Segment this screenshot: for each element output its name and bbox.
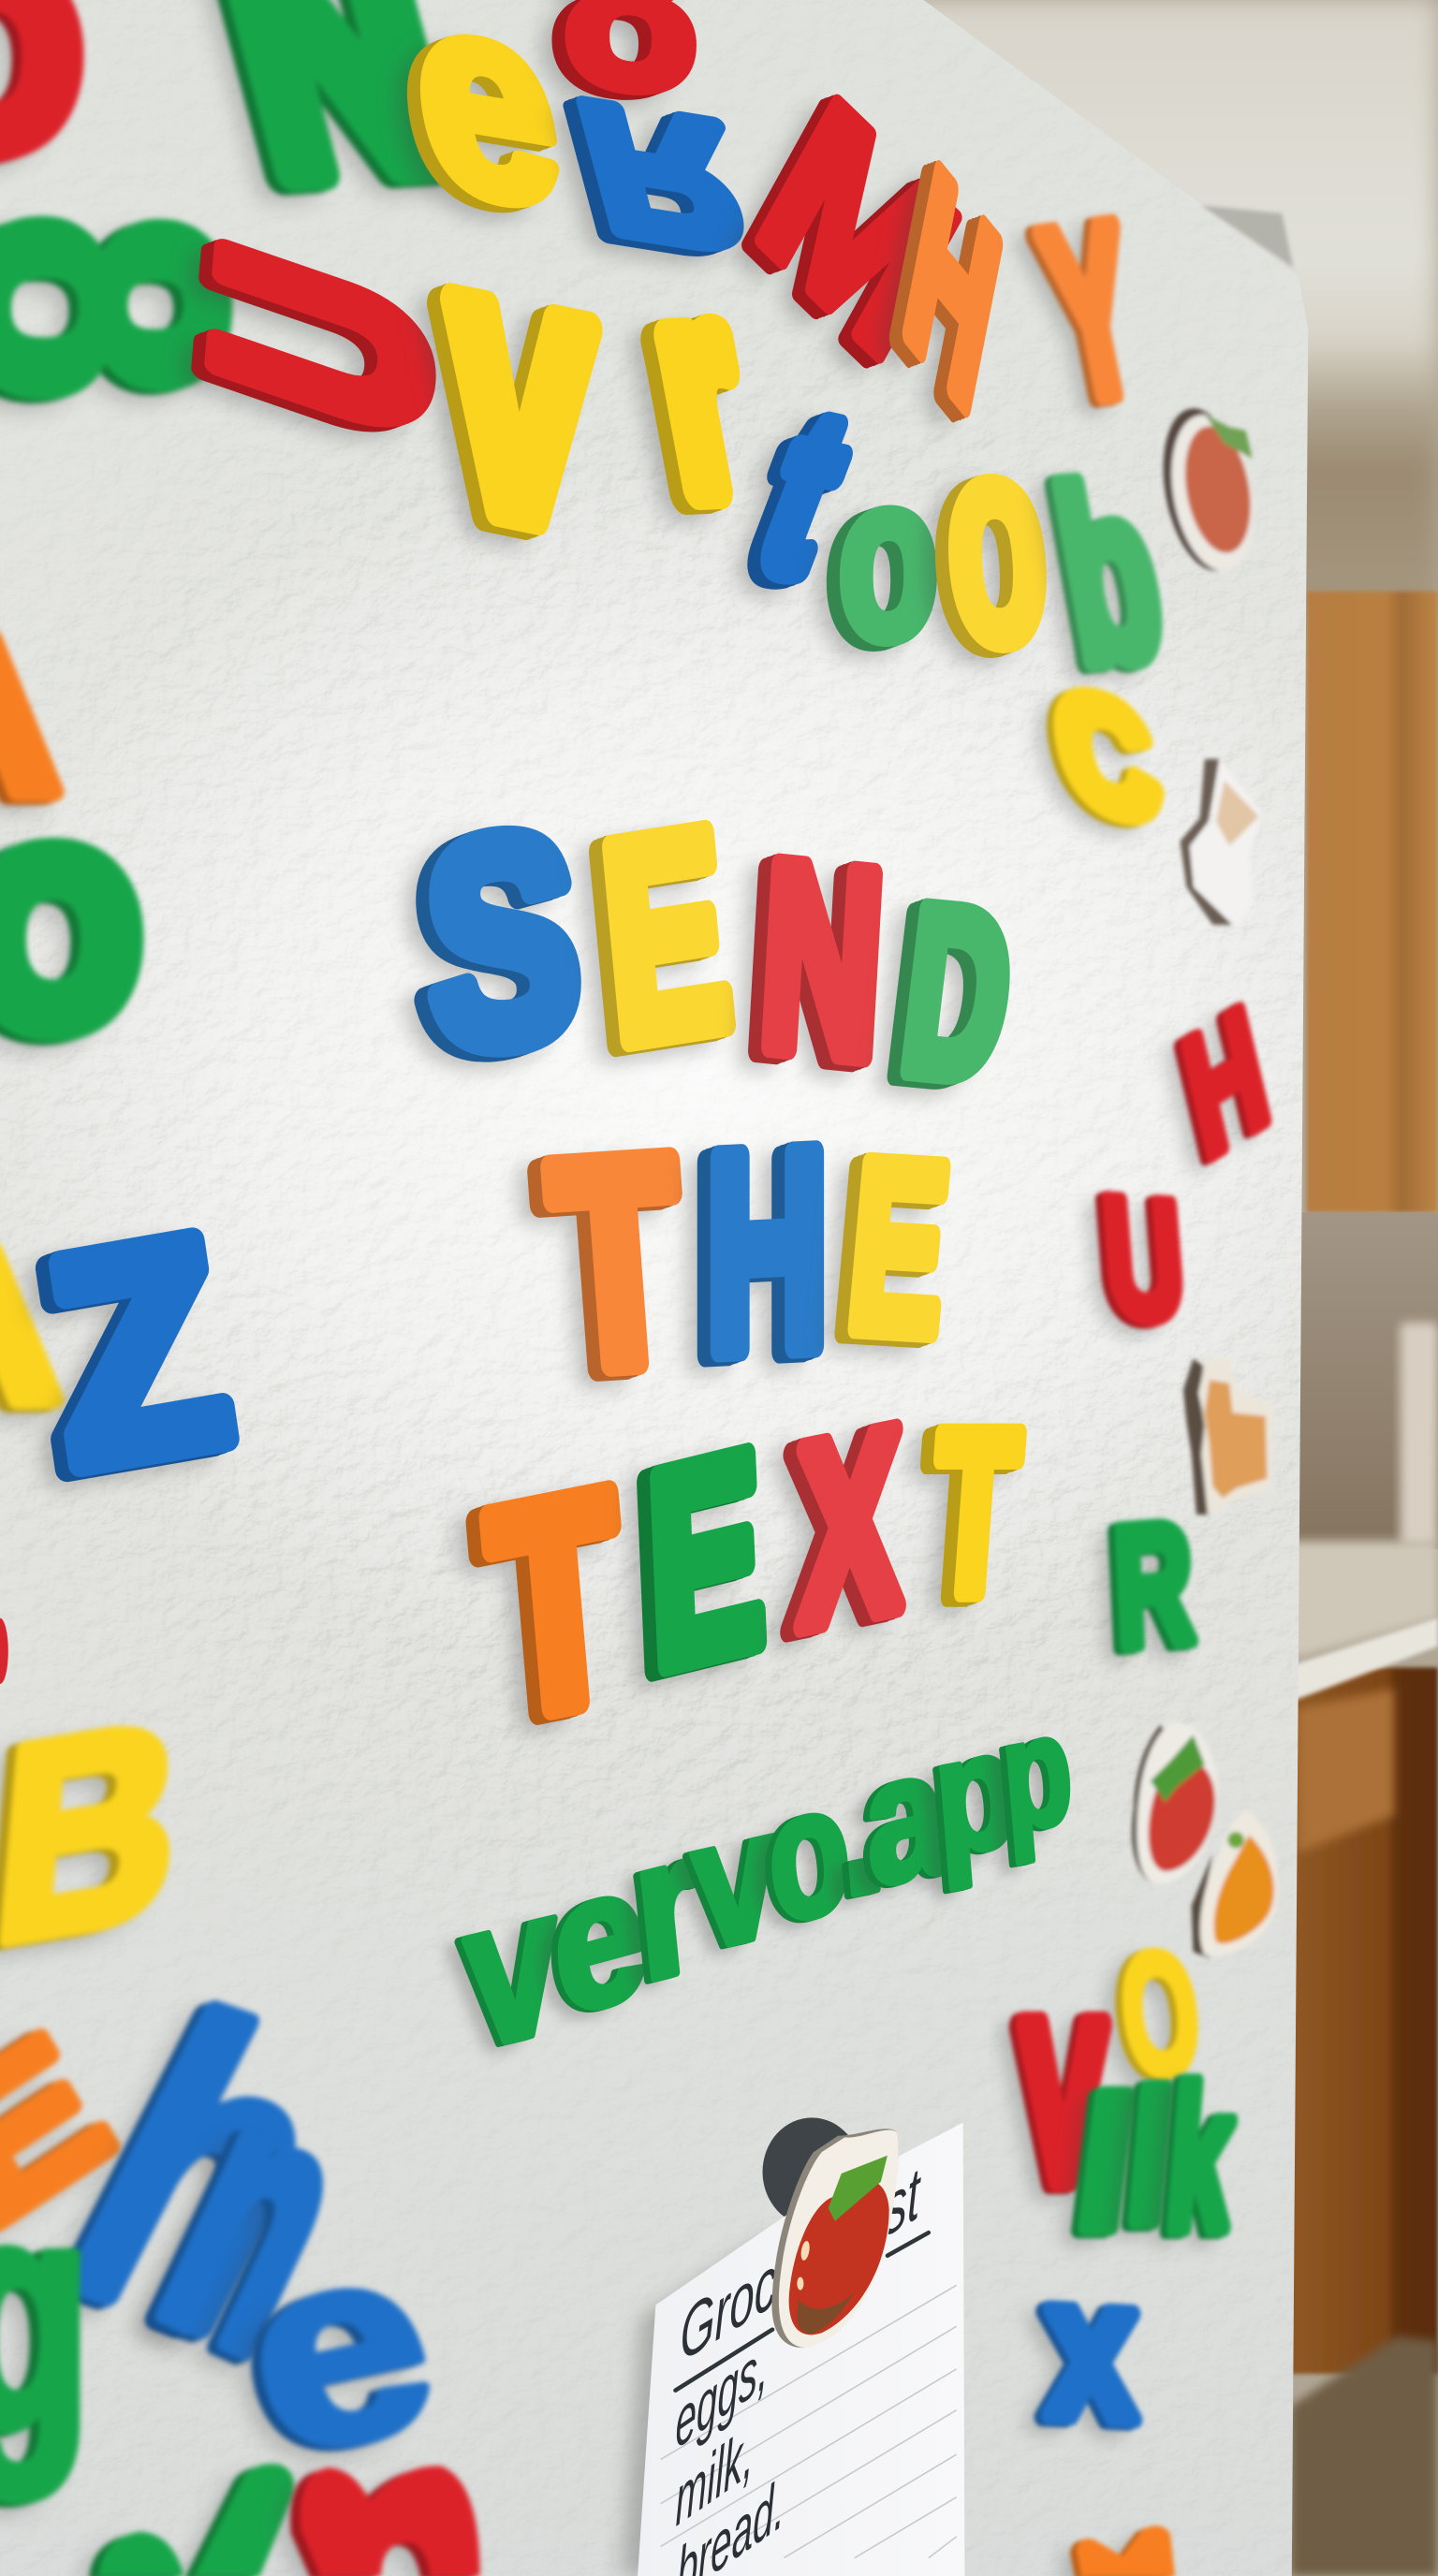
magnet: green partial stem at bottom edge: [194, 2464, 294, 2576]
magnet: red sliver: [0, 1618, 8, 1684]
icon: dark round magnet: [763, 2117, 861, 2226]
letter E: E: [644, 1393, 769, 1726]
white canister: [1401, 1323, 1438, 1546]
icon: apple magnet: [771, 2129, 899, 2348]
url: vervo.app: e: [543, 1821, 656, 2056]
letter T: T: [543, 1097, 692, 1428]
url: vervo.app: v: [685, 1768, 785, 1988]
heading: SEND THE TEXT: [419, 771, 1026, 1778]
magnet: yellow v: v: [446, 158, 596, 609]
icon: tan dog sticker magnet: [1183, 1357, 1273, 1515]
magnet: orange H: H: [891, 113, 1015, 464]
paper sheet: [638, 2123, 964, 2576]
backsplash: [1290, 1212, 1438, 1549]
upper wooden cabinet: [1307, 592, 1438, 1212]
magnet: blue e: e: [217, 2183, 460, 2512]
word: TEXT: [480, 1375, 1026, 1778]
lower wooden cabinet: [1290, 1667, 1438, 2374]
letter S: S: [419, 771, 586, 1110]
letter H: H: [707, 1092, 828, 1411]
magnet: blue h: h: [14, 1938, 395, 2413]
magnet: yellow O: O: [1112, 1918, 1208, 2110]
icon: orange fruit sticker magnet: [1192, 1810, 1278, 1958]
magnet: green o: o: [838, 425, 938, 689]
magnet: red M: M: [726, 47, 991, 410]
url: vervo.app: v: [457, 1841, 568, 2092]
magnet: red partial letter at bottom edge: [301, 2466, 480, 2576]
magnet: red U sideways: U: [154, 215, 488, 468]
magnet: yellow o: o: [937, 373, 1055, 708]
icon: strawberry sticker magnet: [1132, 1722, 1218, 1884]
url: vervo.app: [457, 1678, 1078, 2092]
magnet: green l: l: [1068, 2062, 1144, 2267]
scattered magnets left: [0, 592, 480, 2576]
letter N: N: [755, 806, 889, 1113]
magnet: blue Z: Z: [34, 1176, 244, 1527]
word: THE: [543, 1092, 957, 1428]
countertop: [1290, 1541, 1438, 1660]
magnet: orange Y: Y: [1025, 173, 1160, 450]
note item: milk: milk,: [675, 2411, 753, 2542]
word: SEND: [419, 771, 1023, 1130]
url: vervo.app: r: [624, 1787, 711, 2024]
magnet: red H: H: [1170, 972, 1282, 1195]
magnet: red U: U: [1097, 1162, 1191, 1357]
url: vervo.app: p: [995, 1678, 1078, 1865]
magnet: yellow C: C: [1042, 658, 1171, 854]
magnet: green b: b: [1040, 435, 1180, 714]
note item: eggs: eggs,: [675, 2323, 768, 2465]
title underline: [675, 2232, 929, 2391]
note shadow: [622, 2234, 772, 2576]
magnet: green R: R: [1110, 1487, 1197, 1683]
letter X: X: [799, 1375, 901, 1682]
magnet: yellow r: r: [636, 231, 762, 549]
kitchen background: [888, 0, 1438, 2576]
magnet: green l: l: [1121, 2055, 1181, 2261]
ruled lines: [661, 2285, 957, 2558]
icon: white bird sticker magnet: [1180, 759, 1262, 927]
icon: peach sticker magnet: [1152, 402, 1266, 578]
letter T: T: [925, 1383, 1026, 1641]
magnet: orange partial letter at bottom edge: [1077, 2525, 1175, 2576]
url: vervo.app: a: [857, 1710, 957, 1925]
counter front edge: [1290, 1618, 1438, 1702]
magnet: green partial bump at bottom edge: [98, 2532, 184, 2576]
upper drawer front: [1297, 1689, 1394, 1853]
note title: Grocery List: [681, 2150, 922, 2378]
door texture: [2, 346, 1305, 1897]
magnet: blue t: t: [735, 367, 875, 620]
magnet: blue x: x: [1047, 2234, 1137, 2463]
letter E: E: [840, 1111, 957, 1384]
wall: [888, 0, 1438, 616]
letter D: D: [891, 858, 1023, 1130]
url: vervo.app: p: [928, 1692, 1023, 1891]
letter E: E: [593, 771, 741, 1102]
grocery list note: [622, 2117, 964, 2576]
magnet: green k: k: [1160, 2046, 1240, 2271]
url: vervo.app: o: [759, 1743, 858, 1963]
scattered magnets top: [0, 0, 1180, 854]
floor: [1290, 2336, 1438, 2576]
hinge: [1201, 205, 1294, 268]
letter T: T: [480, 1430, 634, 1778]
magnet: blue n: n: [116, 2010, 400, 2427]
magnet: red V: V: [1022, 1976, 1106, 2226]
magnet: blue R: R: [562, 62, 765, 291]
url: vervo.app: .: [829, 1708, 892, 1939]
